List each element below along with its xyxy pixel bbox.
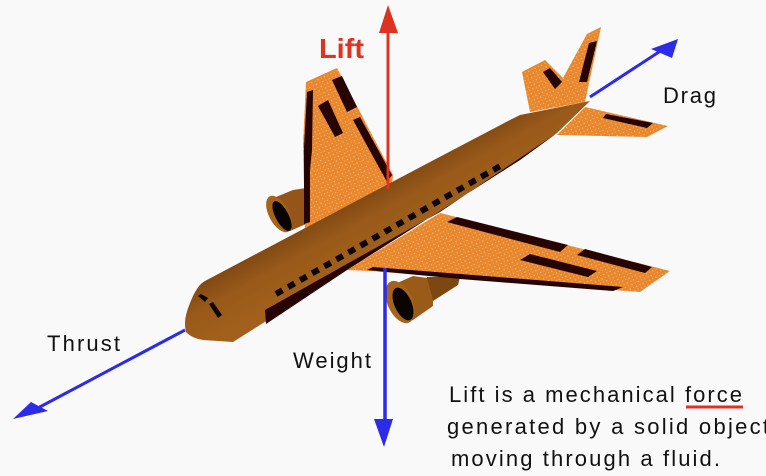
explanation text — [447, 382, 766, 471]
force underline — [686, 406, 743, 408]
drag arrow — [590, 39, 678, 97]
fuselage — [185, 101, 590, 342]
window row — [276, 165, 502, 294]
near wing — [347, 213, 670, 292]
cockpit windows — [198, 294, 222, 318]
weight arrow — [374, 268, 393, 447]
explanation text: moving through a fluid. — [451, 446, 720, 471]
far engine — [261, 188, 306, 236]
weight label: Weight — [293, 348, 371, 373]
lift arrow — [379, 5, 398, 189]
far wing — [303, 68, 393, 228]
lift label: Lift — [319, 33, 364, 64]
thrust label: Thrust — [47, 331, 120, 356]
explanation text: Lift is a mechanical force — [449, 382, 742, 407]
horizontal stabilizer — [557, 107, 668, 137]
near engine — [379, 276, 460, 328]
tail fins — [522, 27, 601, 112]
thrust arrow — [13, 330, 185, 419]
drag label: Drag — [663, 83, 716, 108]
explanation text: generated by a solid object — [447, 414, 766, 439]
